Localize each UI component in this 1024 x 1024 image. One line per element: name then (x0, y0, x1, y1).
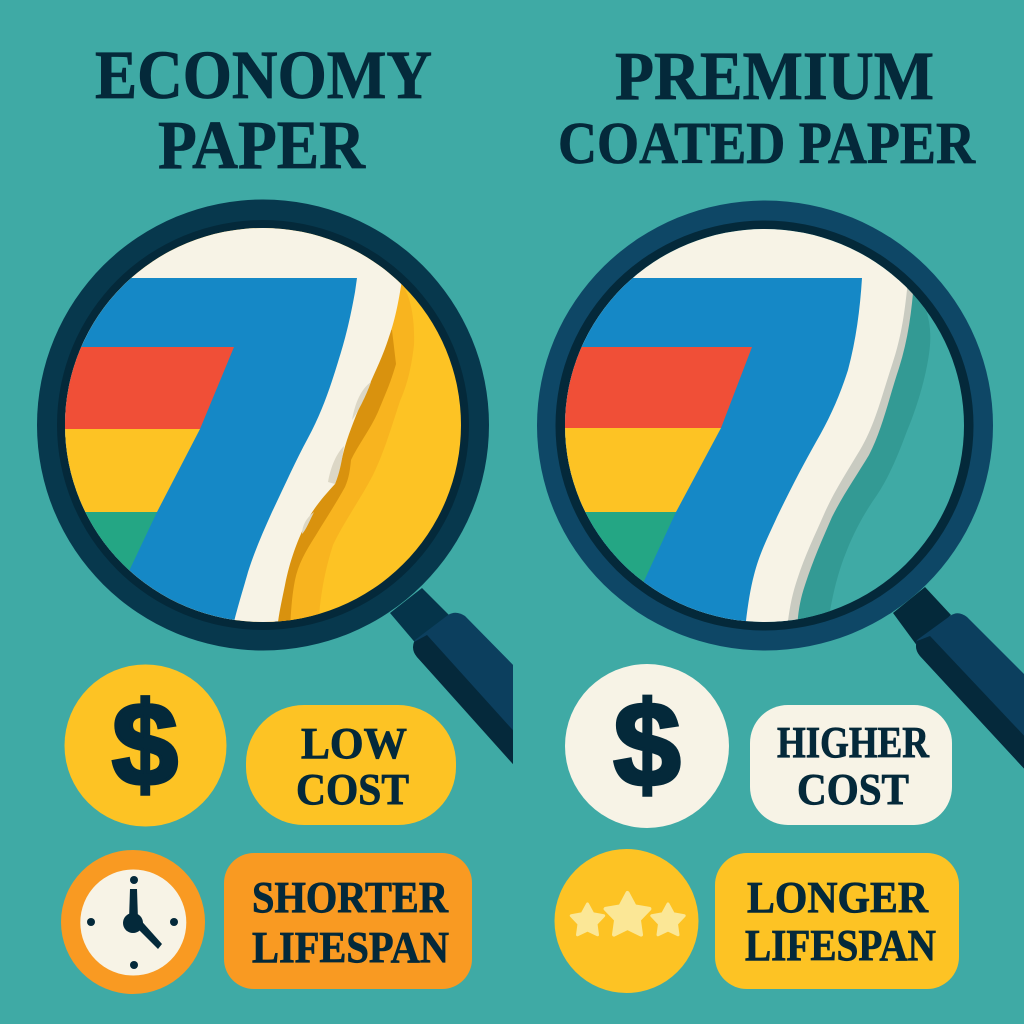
heading: economy paper: ECONOMY (95, 37, 432, 113)
handle (893, 587, 1024, 775)
heading: premium coated paper: PREMIUM (615, 38, 934, 114)
paper (560, 220, 908, 630)
handle (390, 588, 520, 772)
heading: premium coated paper (558, 38, 976, 176)
heading: economy paper (95, 37, 432, 183)
magnifying glass: economy (37, 200, 520, 772)
icon: dollar coin: $ (112, 678, 178, 811)
label: shorter lifespan: LIFESPAN (252, 923, 449, 972)
magnified print with smooth edge (560, 220, 970, 635)
label: longer lifespan: LONGER (747, 873, 929, 922)
label: higher cost: COST (797, 765, 909, 814)
lens ring (37, 200, 489, 650)
panel: premium coated paper (537, 38, 1024, 993)
icon: dollar coin: $ (613, 676, 681, 812)
label: low cost (246, 705, 456, 825)
shadow (780, 285, 930, 630)
colour bands (60, 347, 234, 429)
heading: premium coated paper: COATED PAPER (558, 110, 976, 176)
blue numeral (60, 278, 357, 630)
icon: clock (61, 850, 205, 994)
label: higher cost (750, 705, 952, 825)
icon: dollar coin (565, 664, 729, 828)
magnifying glass: premium (537, 200, 1024, 775)
label: higher cost: HIGHER (777, 718, 930, 767)
paper (60, 220, 402, 630)
label: shorter lifespan: SHORTER (252, 873, 449, 922)
label: low cost: LOW (301, 719, 407, 768)
lens ring (537, 200, 993, 650)
coated paper edge (780, 280, 914, 630)
label: longer lifespan: LIFESPAN (745, 921, 936, 970)
panel: economy paper (37, 37, 520, 994)
icon: three stars (554, 849, 698, 993)
colour bands (560, 347, 752, 428)
heading: economy paper: PAPER (158, 107, 366, 183)
label: longer lifespan (715, 853, 959, 989)
icon: dollar coin (64, 664, 226, 826)
magnified print with torn edge (60, 220, 470, 630)
blue numeral (560, 278, 862, 630)
label: shorter lifespan (224, 853, 472, 989)
torn fibres (352, 382, 371, 420)
label: low cost: COST (296, 765, 409, 814)
